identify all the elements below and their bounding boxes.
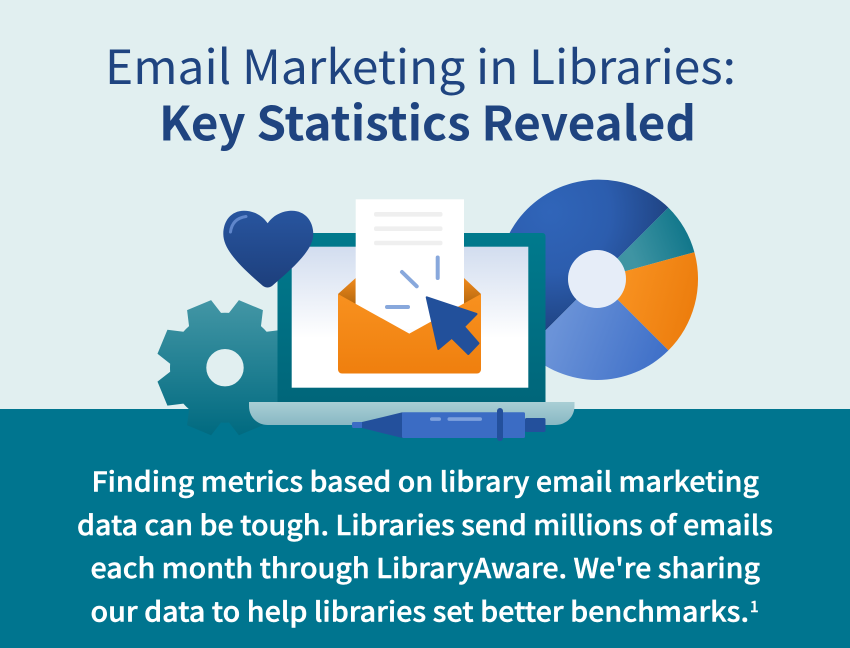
icon: cursor arrow xyxy=(427,297,478,354)
title xyxy=(105,29,736,154)
text block: introduction xyxy=(77,460,773,630)
text block: introduction: our data to help libraries set better benchmarks. xyxy=(90,590,749,630)
icon: laptop xyxy=(249,233,574,425)
chart: pie xyxy=(498,180,698,380)
text block: introduction: 1 xyxy=(750,596,759,617)
letter xyxy=(356,199,464,329)
icon: gear xyxy=(158,300,278,435)
text block: introduction: data can be tough. Libraries send millions of emails xyxy=(77,504,773,543)
icon: pen xyxy=(352,408,546,441)
background: teal band xyxy=(0,409,850,648)
title: Email Marketing in Libraries: xyxy=(105,29,736,98)
icon: heart xyxy=(223,211,313,288)
envelope front xyxy=(338,294,481,374)
background: top panel xyxy=(0,0,850,409)
icon: envelope with letter xyxy=(338,199,481,374)
icon: click sparks xyxy=(387,258,438,307)
title: Key Statistics Revealed xyxy=(159,86,696,154)
text block: introduction: Finding metrics based on library email marketing xyxy=(92,460,759,500)
text block: introduction: each month through LibraryAware. We're sharing xyxy=(90,547,760,586)
